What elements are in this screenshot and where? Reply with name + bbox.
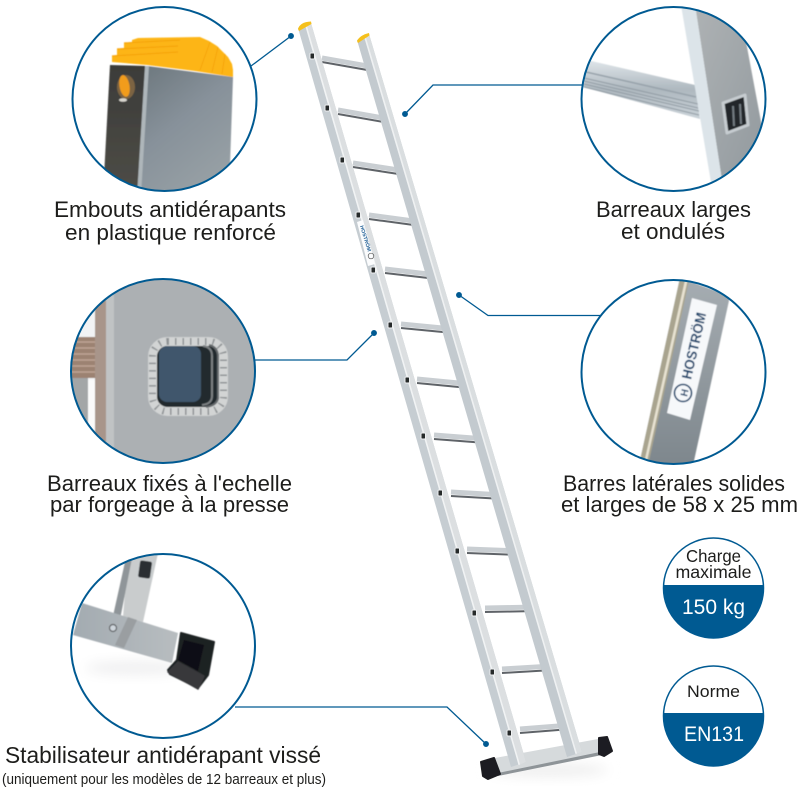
- heading: stabiliser: (uniquement pour les modèles de 12 barreaux et plus): [2, 772, 326, 788]
- ladder: [298, 22, 612, 779]
- heading: press-forged joint: par forgeage à la presse: [50, 492, 289, 517]
- ladder label: [357, 220, 375, 266]
- right rail: [357, 34, 582, 757]
- connector: plastic caps: [251, 34, 293, 66]
- heading: anti-slip tip: [54, 197, 286, 245]
- ladder label: HOSTRÖM: [358, 225, 373, 252]
- heading: stabiliser: Stabilisateur antidérapant vissé: [5, 742, 321, 768]
- heading: side rails: Barres latérales solides: [563, 471, 785, 496]
- heading: anti-slip tip: Embouts antidérapants: [54, 197, 286, 222]
- heading: press-forged joint: Barreaux fixés à l'echelle: [47, 471, 292, 496]
- heading: wide corrugated rungs: et ondulés: [621, 219, 725, 244]
- heading: anti-slip tip: en plastique renforcé: [65, 220, 276, 245]
- brand label: [667, 298, 717, 420]
- badge: maximum load: Charge: [686, 546, 741, 566]
- connector: press forging: [255, 331, 376, 360]
- heading: wide corrugated rungs: Barreaux larges: [596, 197, 751, 222]
- badge: maximum load: [660, 538, 768, 641]
- connector: wide rungs: [403, 85, 582, 116]
- brand label: HOSTRÖM: [678, 311, 709, 381]
- ground shadow: [488, 763, 608, 777]
- ladder rungs: [322, 58, 571, 733]
- heading: wide corrugated rungs: [596, 197, 751, 244]
- feet: [481, 737, 612, 779]
- brand label: H: [679, 388, 692, 398]
- connector: stabiliser: [235, 707, 488, 746]
- heading: stabiliser: [2, 742, 326, 788]
- heading: press-forged joint: [47, 471, 292, 517]
- detail circle: press-forged joint: [70, 278, 256, 464]
- stabiliser bar: [495, 739, 602, 776]
- badge: standard: EN131: [684, 723, 744, 746]
- detail circle: anti-slip stabiliser: [65, 550, 260, 745]
- badge: standard: [660, 666, 768, 769]
- badge: standard: Norme: [687, 682, 740, 701]
- heading: side rails: et larges de 58 x 25 mm: [561, 492, 798, 517]
- connector: side rails: [457, 293, 600, 316]
- badge: maximum load: 150 kg: [682, 596, 745, 619]
- detail circle: anti-slip tip: [70, 0, 260, 195]
- yellow caps: [298, 22, 370, 43]
- detail circle: wide corrugated rungs: [580, 6, 766, 192]
- rung rivets: [310, 53, 512, 736]
- heading: side rails: [561, 471, 798, 517]
- detail circle: side rails with brand label: [575, 275, 770, 470]
- left rail: [298, 23, 526, 767]
- badge: maximum load: maximale: [676, 562, 752, 582]
